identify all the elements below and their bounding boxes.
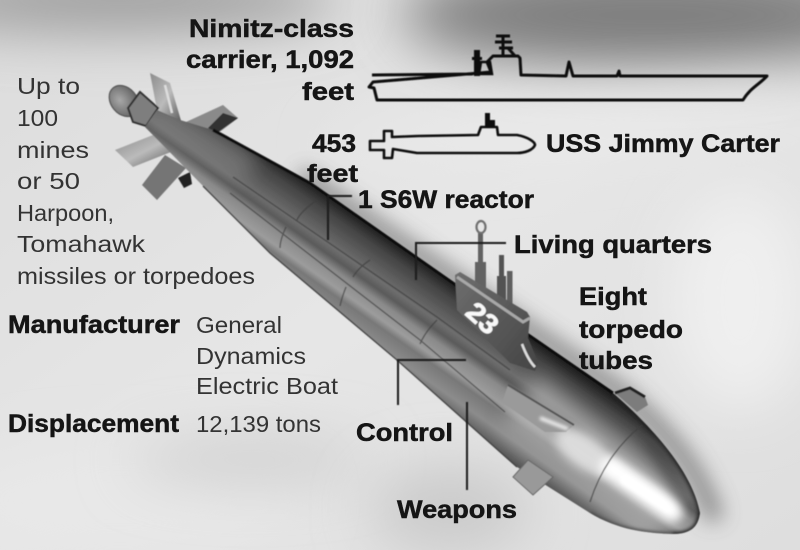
text: armament <box>17 73 255 289</box>
label: torpedo tubes: Eight <box>579 283 648 311</box>
label: reactor: 1 S6W reactor <box>358 186 534 214</box>
label: carrier: carrier, 1,092 <box>186 46 354 74</box>
hull lower edge <box>203 186 517 467</box>
sail <box>455 221 538 371</box>
label: submarine length <box>307 130 359 188</box>
text: armament: 100 <box>17 105 58 131</box>
text: armament: mines <box>17 137 89 163</box>
hull shadow <box>300 175 715 520</box>
hull <box>145 110 700 534</box>
text: manufacturer: General <box>196 312 282 338</box>
text: armament: Up to <box>17 73 80 99</box>
label: carrier: Nimitz-class <box>189 15 354 43</box>
text: armament: Harpoon, <box>17 200 114 226</box>
text: manufacturer: Dynamics <box>196 343 306 369</box>
sail number: 23 <box>460 296 505 341</box>
upper hull edge <box>213 130 613 393</box>
label: living quarters: Living quarters <box>514 231 712 259</box>
text: displacement: 12,139 tons <box>196 411 321 437</box>
text: manufacturer <box>8 311 339 399</box>
label: submarine length: 453 <box>312 130 356 158</box>
text: displacement <box>8 410 321 438</box>
label: control: Control <box>356 419 453 447</box>
label: carrier: feet <box>302 78 355 106</box>
label: torpedo tubes: tubes <box>579 347 653 375</box>
bow plane <box>513 460 553 495</box>
propeller shroud <box>103 80 158 126</box>
forward top fin <box>615 388 648 412</box>
text: armament: or 50 <box>17 168 80 194</box>
label: USS Jimmy Carter: USS Jimmy Carter <box>546 130 780 158</box>
label: carrier <box>186 15 355 106</box>
submarine illustration <box>103 73 715 534</box>
tail fins <box>115 73 238 200</box>
label: torpedo tubes <box>579 283 683 375</box>
label: submarine length: feet <box>307 160 359 188</box>
submarine silhouette <box>370 113 535 158</box>
text: manufacturer: Manufacturer <box>8 311 180 339</box>
hull shading and highlights <box>150 110 700 534</box>
text: displacement: Displacement <box>8 410 180 438</box>
label: weapons: Weapons <box>397 496 517 524</box>
torpedo tube blister <box>502 385 574 432</box>
label: torpedo tubes: torpedo <box>579 316 683 344</box>
text: armament: Tomahawk <box>17 231 146 257</box>
leader lines <box>328 196 506 490</box>
text: manufacturer: Electric Boat <box>196 373 339 399</box>
hull seams <box>230 177 642 502</box>
text: armament: missiles or torpedoes <box>17 263 255 289</box>
carrier silhouette <box>369 36 767 100</box>
